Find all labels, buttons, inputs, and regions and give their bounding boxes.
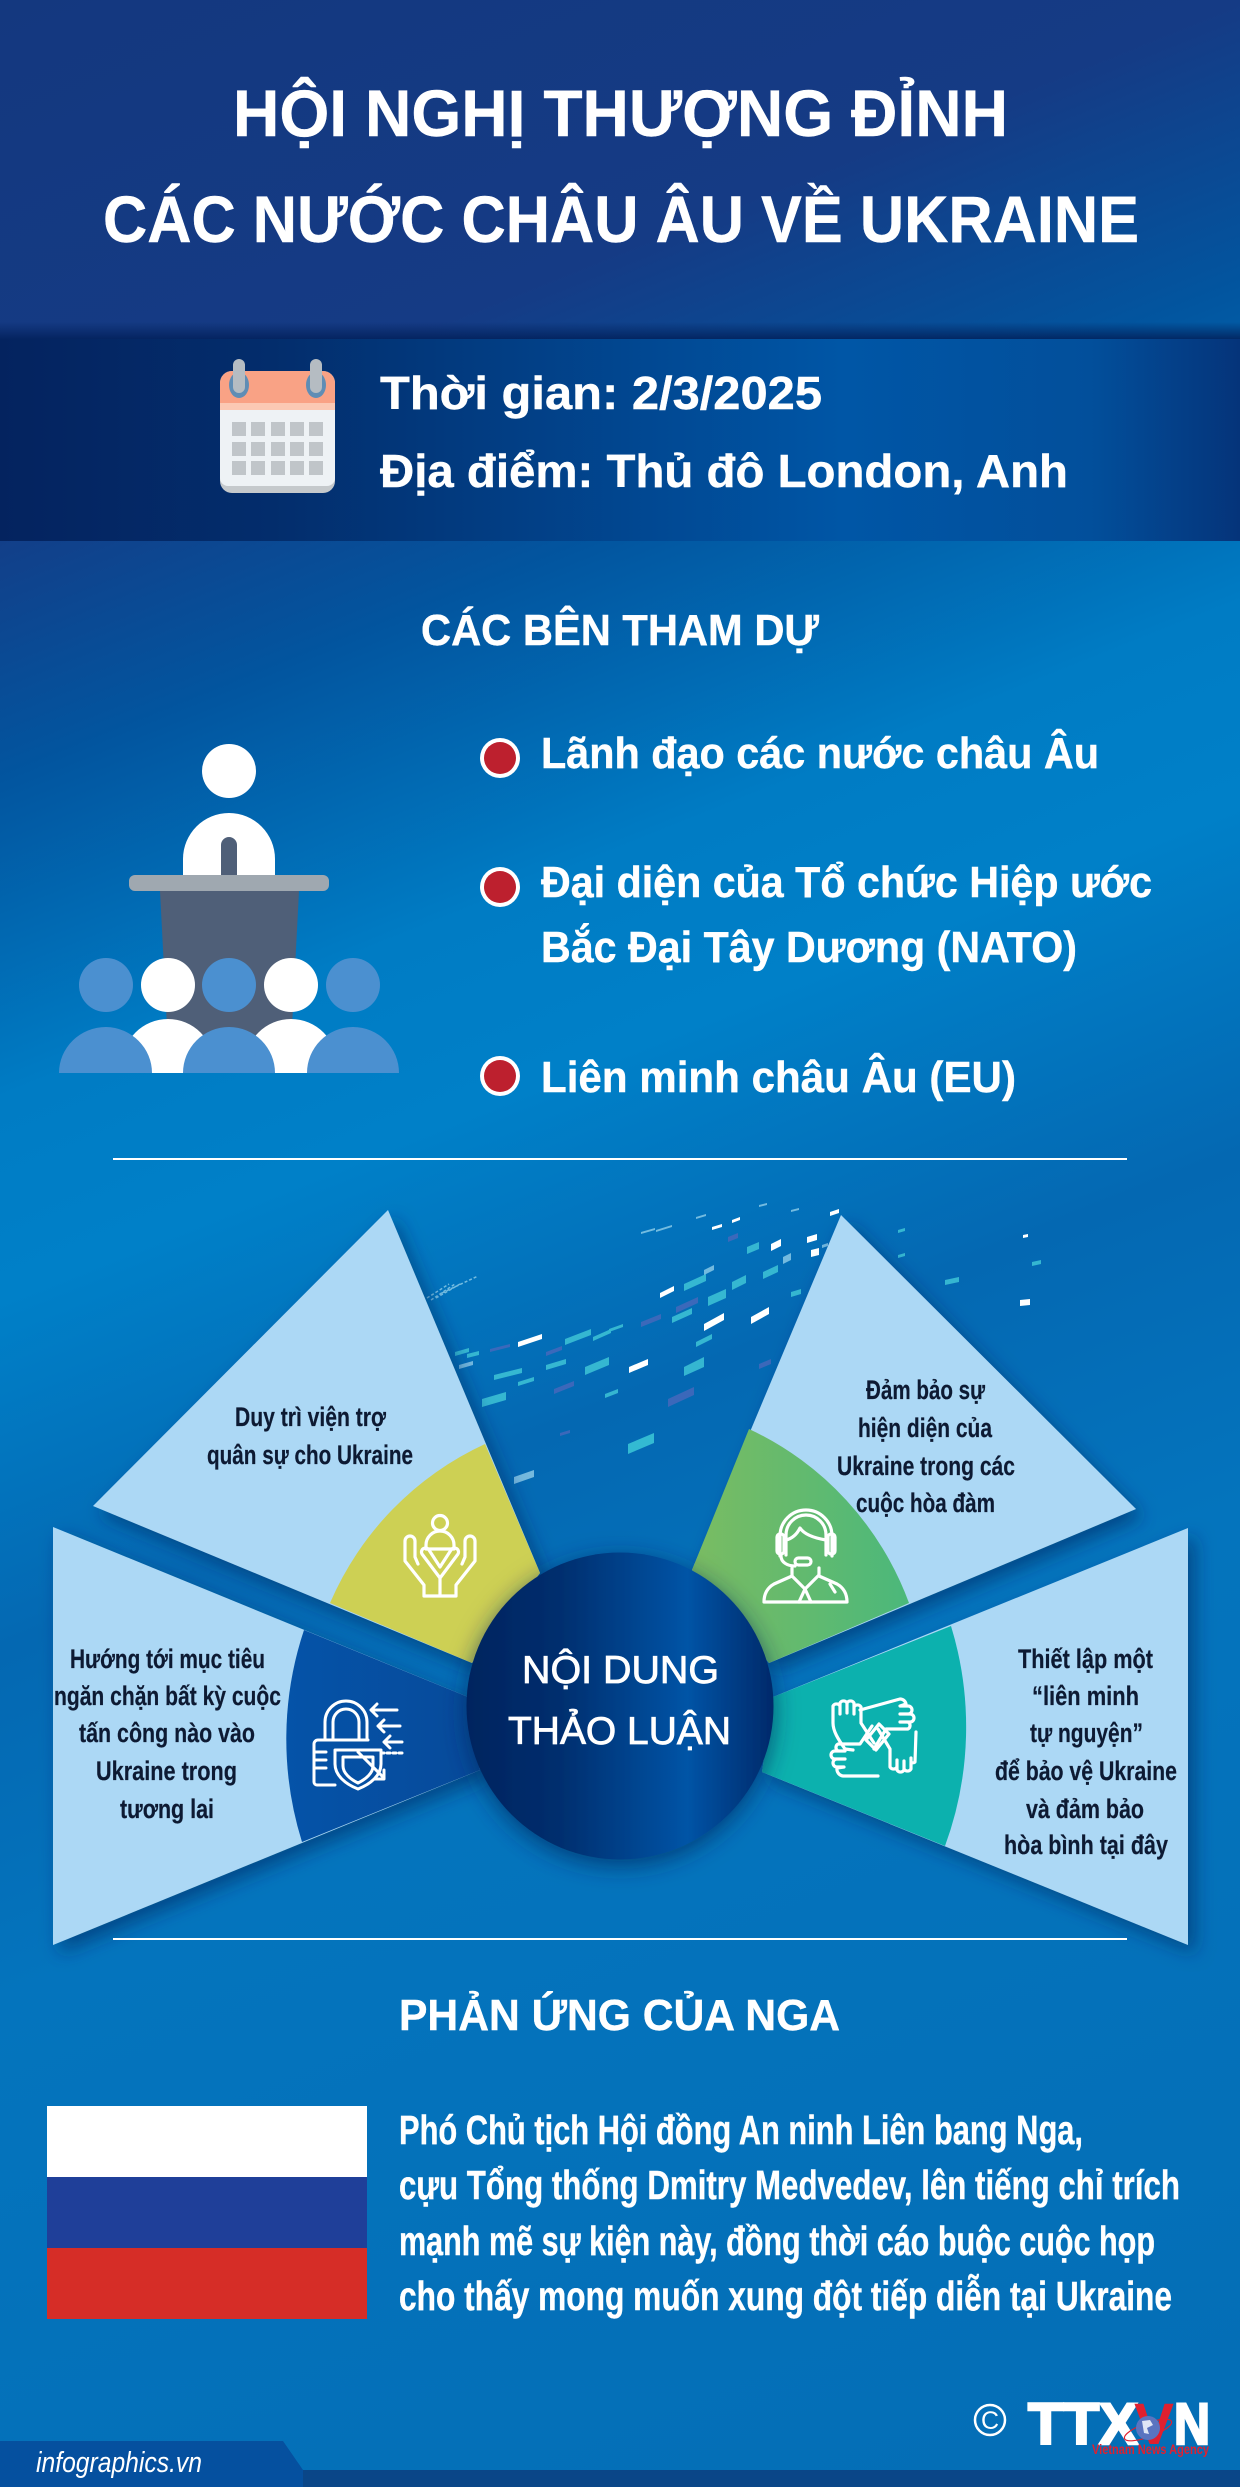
icon: calendar — [220, 359, 335, 493]
title — [103, 76, 1139, 256]
text: Ukraine presence — [837, 1375, 1015, 1518]
text: military aid — [207, 1402, 413, 1470]
footer tab: infographics.vn — [0, 2441, 303, 2487]
text: prevent future attacks: Ukraine trong — [96, 1756, 237, 1786]
heading: Russia's reaction: PHẢN ỨNG CỦA NGA — [399, 1989, 840, 2040]
center circle: discussion content — [466, 1552, 774, 1860]
icon: Russian flag — [47, 2106, 367, 2319]
text: voluntary coalition: và đảm bảo — [1026, 1794, 1144, 1824]
icon: four linked hands — [831, 1699, 916, 1776]
text: voluntary coalition: để bảo vệ Ukraine — [995, 1756, 1177, 1786]
text: Ukraine presence: cuộc hòa đàm — [856, 1488, 995, 1518]
logo: TTXVN: V — [1134, 2392, 1174, 2457]
text: voluntary coalition: Thiết lập một — [1018, 1644, 1153, 1674]
text: Ukraine presence: Đảm bảo sự — [866, 1375, 985, 1405]
text: voluntary coalition: tự nguyện” — [1030, 1718, 1143, 1748]
logo: TTXVN: TTX — [1028, 2392, 1138, 2457]
panel: discussion topics — [53, 1210, 1188, 1945]
text: prevent future attacks: Hướng tới mục tiêu — [70, 1644, 265, 1674]
text: Ukraine presence: Ukraine trong các — [837, 1451, 1015, 1481]
icon: speaker at podium with audience — [59, 744, 399, 1073]
center circle: discussion content: THẢO LUẬN — [508, 1709, 731, 1753]
text: voluntary coalition: “liên minh — [1032, 1681, 1139, 1711]
bullet 2: Đại diện của Tổ chức Hiệp ước — [541, 858, 1152, 907]
footer tab: infographics.vn: infographics.vn — [36, 2447, 202, 2479]
title: HỘI NGHỊ THƯỢNG ĐỈNH — [233, 76, 1008, 150]
title: CÁC NƯỚC CHÂU ÂU VỀ UKRAINE — [103, 182, 1139, 256]
text: military aid: quân sự cho Ukraine — [207, 1440, 413, 1470]
bullet 2: Bắc Đại Tây Dương (NATO) — [541, 922, 1077, 972]
panel: voluntary coalition — [762, 1528, 1188, 1945]
text: Ukraine presence: hiện diện của — [858, 1413, 993, 1443]
text: military aid: Duy trì viện trợ — [235, 1402, 387, 1432]
panel: military aid — [93, 1210, 540, 1663]
text: prevent future attacks — [54, 1644, 281, 1824]
text: prevent future attacks: ngăn chặn bất kỳ cuộc — [54, 1681, 281, 1711]
logo: TTXVN: N — [1174, 2392, 1210, 2457]
place text: Địa điểm: Thủ đô London, Anh — [380, 445, 1068, 497]
logo: TTXVN — [975, 2392, 1210, 2457]
panel: prevent future attacks — [53, 1527, 480, 1945]
footer — [0, 2392, 1240, 2487]
bullet list: participants — [480, 728, 1152, 1102]
panel: Ukraine presence — [692, 1215, 1136, 1663]
icon: lock and shield — [314, 1701, 403, 1789]
panel: time and place bar — [0, 339, 1240, 541]
logo: TTXVN: Vietnam News Agency — [1092, 2441, 1209, 2457]
icon: hands holding person — [405, 1516, 475, 1596]
center circle: discussion content: NỘI DUNG — [522, 1648, 719, 1692]
text: voluntary coalition: hòa bình tại đây — [1004, 1830, 1168, 1860]
text: voluntary coalition — [995, 1644, 1177, 1860]
text: prevent future attacks: tấn công nào vào — [79, 1718, 255, 1748]
text block: Russia's reaction — [399, 2107, 1180, 2319]
icon: person with headset — [764, 1510, 847, 1602]
logo: TTXVN: C — [981, 2407, 999, 2435]
time text: Thời gian: 2/3/2025 — [380, 367, 822, 419]
text: prevent future attacks: tương lai — [120, 1794, 214, 1824]
bullet 3: Liên minh châu Âu (EU) — [541, 1052, 1016, 1102]
heading: participants: CÁC BÊN THAM DỰ — [421, 605, 819, 655]
bullet 1: Lãnh đạo các nước châu Âu — [541, 728, 1099, 778]
bullet 2 — [480, 858, 1152, 972]
